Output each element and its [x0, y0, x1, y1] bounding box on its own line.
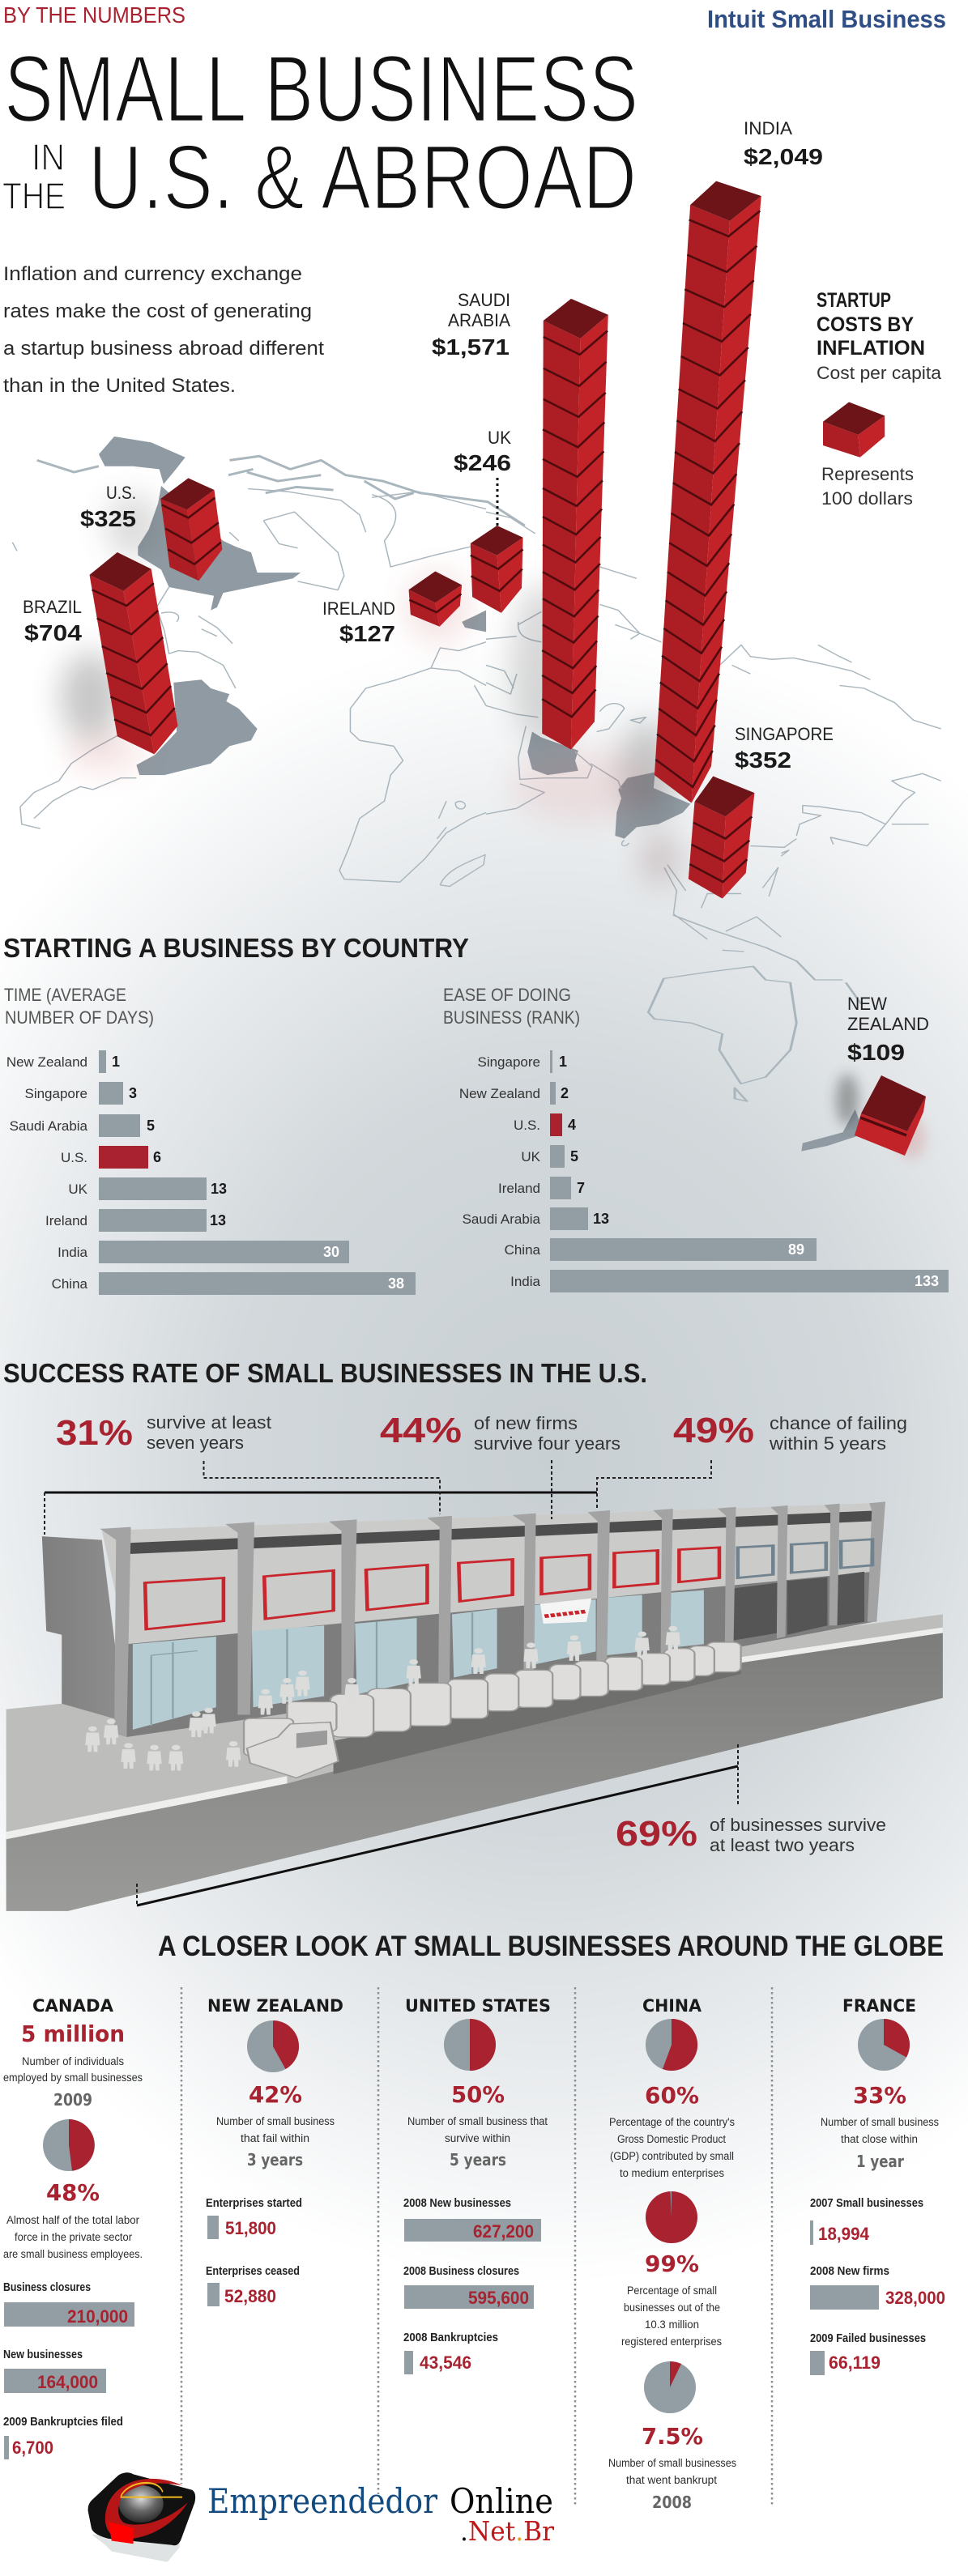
- label: Saudi Arabia: [432, 290, 510, 360]
- leader lines: [45, 1460, 738, 1905]
- panel: United States: UNITED STATES: [405, 1996, 551, 2016]
- shop signs: [145, 1548, 719, 1629]
- world map: [12, 436, 941, 1152]
- pedestrians: [85, 1626, 680, 1770]
- pie: China 99%: [646, 2191, 697, 2243]
- illustration: storefront street: [6, 1501, 943, 1911]
- chart: time average number of days: [4, 985, 416, 1295]
- parked cars: [244, 1642, 741, 1778]
- pillars: [100, 1501, 885, 1737]
- column dividers: [181, 1987, 772, 2507]
- panel: Canada: Number of individuals: [22, 2055, 124, 2067]
- chart: ease of doing business rank: China: [505, 1242, 541, 1258]
- panel: China: 60%: [645, 2082, 699, 2109]
- label: New Zealand: $109: [847, 1040, 905, 1065]
- chart: ease of doing business rank: BUSINESS (RANK): [443, 1007, 580, 1028]
- panel: New Zealand: Number of small business: [216, 2115, 335, 2127]
- chart: ease of doing business rank: 1: [559, 1054, 567, 1070]
- panel: United States: 2008 Business closures: [403, 2265, 519, 2278]
- label: Singapore: $352: [735, 747, 791, 773]
- panel: China: Gross Domestic Product: [617, 2133, 726, 2145]
- stat: 44%: 44%: [380, 1411, 462, 1450]
- chart: time average number of days: Saudi Arabia: [10, 1118, 88, 1134]
- chart: ease of doing business rank: 13: [593, 1211, 609, 1227]
- stat: 44%: [380, 1411, 620, 1454]
- panel: New Zealand: Enterprises ceased: [206, 2265, 300, 2278]
- label: UK: [454, 428, 511, 475]
- label: Singapore: SINGAPORE: [735, 724, 834, 744]
- chart: time average number of days: 3: [129, 1085, 137, 1101]
- pie: United States 50%: [444, 2019, 496, 2071]
- panel: New Zealand: 3 years: [247, 2150, 303, 2169]
- legend: startup costs: Cost per capita: [817, 363, 942, 383]
- sidewalk: [6, 1615, 943, 1839]
- stat: 69%: at least two years: [710, 1835, 855, 1855]
- chart: time average number of days: India: [58, 1245, 88, 1260]
- chart: ease of doing business rank: UK: [521, 1149, 541, 1165]
- panel: Canada: employed by small businesses: [3, 2071, 143, 2084]
- panel: Canada: force in the private sector: [15, 2231, 132, 2243]
- chart: ease of doing business rank: India: [510, 1274, 541, 1289]
- stat: 69%: of businesses survive: [710, 1815, 886, 1835]
- intro text: rates make the cost of generating: [3, 300, 312, 322]
- panel: France: 2007 Small businesses: [810, 2197, 923, 2210]
- cube stack: India: [655, 181, 761, 803]
- stat: 49%: [673, 1411, 907, 1454]
- panel: New Zealand: 42%: [249, 2081, 302, 2108]
- label: Ireland: IRELAND: [322, 598, 395, 619]
- panel: China: that went bankrupt: [626, 2474, 717, 2486]
- label: UK: UK: [488, 428, 511, 448]
- stat: 31%: seven years: [147, 1433, 244, 1453]
- panel: China: Percentage of small: [627, 2284, 717, 2297]
- panel: United States: 595,600: [468, 2288, 529, 2308]
- stat: 49%: 49%: [673, 1411, 754, 1450]
- label: Brazil: [23, 597, 82, 645]
- label: U.S.: [80, 483, 136, 531]
- cube stack: Ireland: [409, 572, 462, 627]
- label: India: INDIA: [744, 118, 792, 138]
- panel: Canada: New businesses: [3, 2348, 83, 2361]
- panel: United States: survive within: [445, 2132, 510, 2144]
- kicker: by the numbers: BY THE NUMBERS: [3, 2, 185, 28]
- panel: France: 2008 New firms: [810, 2265, 889, 2278]
- chart: time average number of days: TIME (AVERAGE: [4, 985, 126, 1005]
- panel: China: 10.3 million: [645, 2318, 699, 2331]
- legend: startup costs: 100 dollars: [821, 488, 913, 509]
- panel: China: businesses out of the: [624, 2301, 720, 2314]
- panel: Canada: Almost half of the total labor: [6, 2214, 139, 2226]
- panel: Canada: 48%: [46, 2179, 100, 2206]
- intro text: Inflation and currency exchange: [3, 263, 302, 285]
- label: Brazil: BRAZIL: [23, 597, 82, 617]
- panel: United States: 50%: [451, 2081, 505, 2108]
- panel: France: FRANCE: [842, 1996, 916, 2016]
- cube stack: Saudi Arabia: [542, 299, 608, 750]
- panel: France: 328,000: [885, 2288, 945, 2308]
- label: Ireland: $127: [339, 621, 395, 646]
- chart: time average number of days: 13: [210, 1212, 226, 1228]
- chart: ease of doing business rank: New Zealand: [459, 1086, 540, 1101]
- legend: startup costs: [817, 289, 942, 509]
- stat: 49%: within 5 years: [769, 1433, 886, 1454]
- panel: China: (GDP) contributed by small: [610, 2150, 734, 2162]
- cube stack: New Zealand: [855, 1075, 926, 1156]
- intro text: than in the United States.: [3, 375, 236, 397]
- panel: New Zealand: NEW ZEALAND: [207, 1996, 343, 2016]
- label: Saudi Arabia: $1,571: [432, 334, 510, 360]
- pie: China 60%: [646, 2019, 697, 2071]
- stat: 44%: survive four years: [474, 1433, 620, 1454]
- label: U.S.: U.S.: [106, 483, 136, 503]
- panel: France: 66,119: [829, 2352, 881, 2373]
- panel: France: Number of small business: [821, 2116, 939, 2128]
- chart: time average number of days: New Zealand: [6, 1054, 87, 1070]
- heading: starting a business by country: STARTING A BUSINESS BY COUNTRY: [3, 933, 469, 963]
- building side wall: [42, 1536, 126, 1737]
- panel: China: CHINA: [642, 1996, 702, 2016]
- label: Saudi Arabia: SAUDI: [458, 290, 510, 310]
- label: Saudi Arabia: ARABIA: [448, 310, 510, 330]
- title: SMALL BUSINESS: [4, 36, 638, 142]
- cube stack: UK: [471, 526, 523, 613]
- chart: ease of doing business rank: Singapore: [477, 1054, 540, 1070]
- logo text: Empreendedor Online: [207, 2481, 554, 2547]
- chart: ease of doing business rank: 89: [788, 1241, 804, 1258]
- map east: [486, 512, 941, 939]
- label: Singapore: [735, 724, 834, 773]
- chart: ease of doing business rank: EASE OF DOING: [443, 985, 571, 1005]
- label: UK: $246: [454, 450, 511, 475]
- panel: Canada: Business closures: [3, 2281, 91, 2294]
- legend: startup costs: STARTUP: [817, 289, 891, 312]
- chart: time average number of days: 6: [153, 1149, 161, 1165]
- title: IN: [32, 136, 65, 178]
- cube stack: U.S.: [160, 478, 222, 581]
- panel: Canada: 210,000: [67, 2306, 128, 2327]
- cube shadows: [60, 494, 926, 1159]
- panel: United States: 43,546: [420, 2352, 471, 2373]
- sale banner: [540, 1599, 591, 1624]
- title: U.S. & ABROAD: [88, 126, 637, 228]
- panel: United States: [403, 1996, 551, 2374]
- panel: France: 1 year: [856, 2152, 904, 2171]
- cube stack: Brazil: [90, 552, 178, 754]
- label: Ireland: [322, 598, 395, 646]
- panel: Canada: 2009: [53, 2090, 92, 2110]
- chart: time average number of days: 5: [147, 1118, 155, 1134]
- chart: ease of doing business rank: 133: [915, 1273, 939, 1289]
- panel: New Zealand: 51,800: [225, 2218, 276, 2238]
- chart: time average number of days: U.S.: [61, 1150, 87, 1165]
- title: [2, 36, 638, 228]
- panel: Canada: CANADA: [32, 1996, 114, 2016]
- map australia: [648, 915, 864, 1152]
- icon: Empreendedor Online logo: [88, 2472, 195, 2562]
- panel: New Zealand: Enterprises started: [206, 2197, 302, 2210]
- panel: China: registered enterprises: [621, 2335, 722, 2348]
- panel: France: 2009 Failed businesses: [810, 2332, 926, 2345]
- panel: United States: 2008 Bankruptcies: [403, 2331, 498, 2344]
- chart: ease of doing business rank: 4: [568, 1117, 576, 1133]
- chart: time average number of days: China: [52, 1276, 88, 1292]
- title: THE: [2, 175, 66, 217]
- label: New Zealand: ZEALAND: [847, 1014, 929, 1034]
- dotted leader: UK: [496, 478, 499, 526]
- storefront level: [126, 1572, 874, 1737]
- panel: France: that close within: [841, 2133, 918, 2145]
- stat: 69%: 69%: [616, 1814, 697, 1854]
- stat: 69%: [616, 1814, 886, 1855]
- heading: success rate: SUCCESS RATE OF SMALL BUSINESSES IN THE U.S.: [3, 1358, 647, 1388]
- panel: Canada: 2009 Bankruptcies filed: [3, 2416, 123, 2429]
- panel: China: 2008: [652, 2493, 692, 2512]
- pie: France 33%: [858, 2019, 910, 2071]
- chart: ease of doing business rank: U.S.: [514, 1118, 540, 1133]
- intro text: [3, 263, 324, 397]
- chart: ease of doing business rank: [443, 985, 949, 1292]
- chart: ease of doing business rank: 2: [561, 1085, 569, 1101]
- panel: United States: 5 years: [450, 2150, 506, 2169]
- panel: Canada: [3, 1996, 143, 2459]
- map north: [37, 436, 525, 526]
- panel: United States: 2008 New businesses: [403, 2197, 511, 2210]
- stat: 49%: chance of failing: [770, 1413, 907, 1433]
- chart: ease of doing business rank: 5: [570, 1148, 578, 1165]
- chart: time average number of days: 30: [323, 1244, 339, 1260]
- panel: Canada: 164,000: [37, 2372, 98, 2392]
- panel: France: [810, 1996, 945, 2375]
- chart: ease of doing business rank: 7: [577, 1180, 585, 1196]
- logo text: Empreendedor Online: Empreendedor: [207, 2481, 438, 2521]
- chart: time average number of days: UK: [68, 1182, 88, 1197]
- label: Brazil: $704: [24, 620, 82, 645]
- label: India: [744, 118, 823, 169]
- cube stack: Singapore: [689, 777, 754, 899]
- panel: China: 7.5%: [642, 2423, 703, 2450]
- chart: ease of doing business rank: Ireland: [498, 1181, 540, 1196]
- pie: New Zealand 42%: [247, 2020, 299, 2072]
- legend: startup costs: INFLATION: [817, 337, 925, 360]
- panel: France: 33%: [853, 2082, 906, 2109]
- panel: Canada: 6,700: [12, 2438, 53, 2458]
- chart: time average number of days: 13: [211, 1181, 227, 1197]
- panel: China: [608, 1996, 736, 2512]
- label: India: $2,049: [744, 144, 823, 169]
- legend: startup costs: Represents: [821, 464, 914, 484]
- stat: 31%: survive at least: [147, 1412, 271, 1433]
- chart: time average number of days: 1: [112, 1054, 120, 1070]
- panel: New Zealand: that fail within: [241, 2132, 309, 2144]
- chart: time average number of days: 38: [388, 1275, 404, 1292]
- logo text: Empreendedor Online: .Net.Br: [460, 2515, 554, 2547]
- chart: ease of doing business rank: Saudi Arabia: [463, 1211, 541, 1227]
- shop windows: [133, 1590, 704, 1730]
- map west: [12, 486, 486, 887]
- panel: Canada: 5 million: [21, 2020, 125, 2047]
- stat: 31%: [56, 1412, 271, 1453]
- panel: Canada: are small business employees.: [3, 2248, 143, 2260]
- chart: time average number of days: NUMBER OF DAYS): [5, 1007, 154, 1028]
- logo text: Empreendedor Online: Online: [450, 2481, 553, 2521]
- pie: China 7.5%: [644, 2361, 696, 2413]
- panel: China: Number of small businesses: [608, 2457, 736, 2469]
- label: U.S.: $325: [80, 506, 136, 531]
- stat: 31%: 31%: [56, 1413, 133, 1453]
- intro text: a startup business abroad different: [3, 338, 324, 360]
- chart: time average number of days: Ireland: [45, 1213, 87, 1228]
- label: New Zealand: NEW: [847, 994, 887, 1014]
- panel: New Zealand: [206, 1996, 343, 2306]
- panel: New Zealand: 52,880: [224, 2286, 276, 2306]
- panel: China: Percentage of the country's: [609, 2116, 735, 2128]
- panel: France: 18,994: [818, 2224, 870, 2244]
- road: [6, 1633, 943, 1911]
- legend: startup costs: COSTS BY: [817, 313, 914, 336]
- curb: [6, 1776, 287, 1839]
- panel: China: 99%: [645, 2250, 699, 2277]
- panel: United States: Number of small business that: [407, 2115, 548, 2127]
- panel: China: to medium enterprises: [620, 2167, 724, 2179]
- pie: Canada 48%: [43, 2119, 95, 2171]
- chart: time average number of days: Singapore: [24, 1086, 87, 1101]
- icon: legend cube: [823, 402, 885, 458]
- panel: United States: 627,200: [473, 2221, 534, 2242]
- logo: Intuit Small Business: Intuit Small Business: [707, 5, 946, 33]
- label: New Zealand: [847, 994, 929, 1065]
- upper facade: [102, 1503, 883, 1644]
- stat: 44%: of new firms: [474, 1413, 578, 1433]
